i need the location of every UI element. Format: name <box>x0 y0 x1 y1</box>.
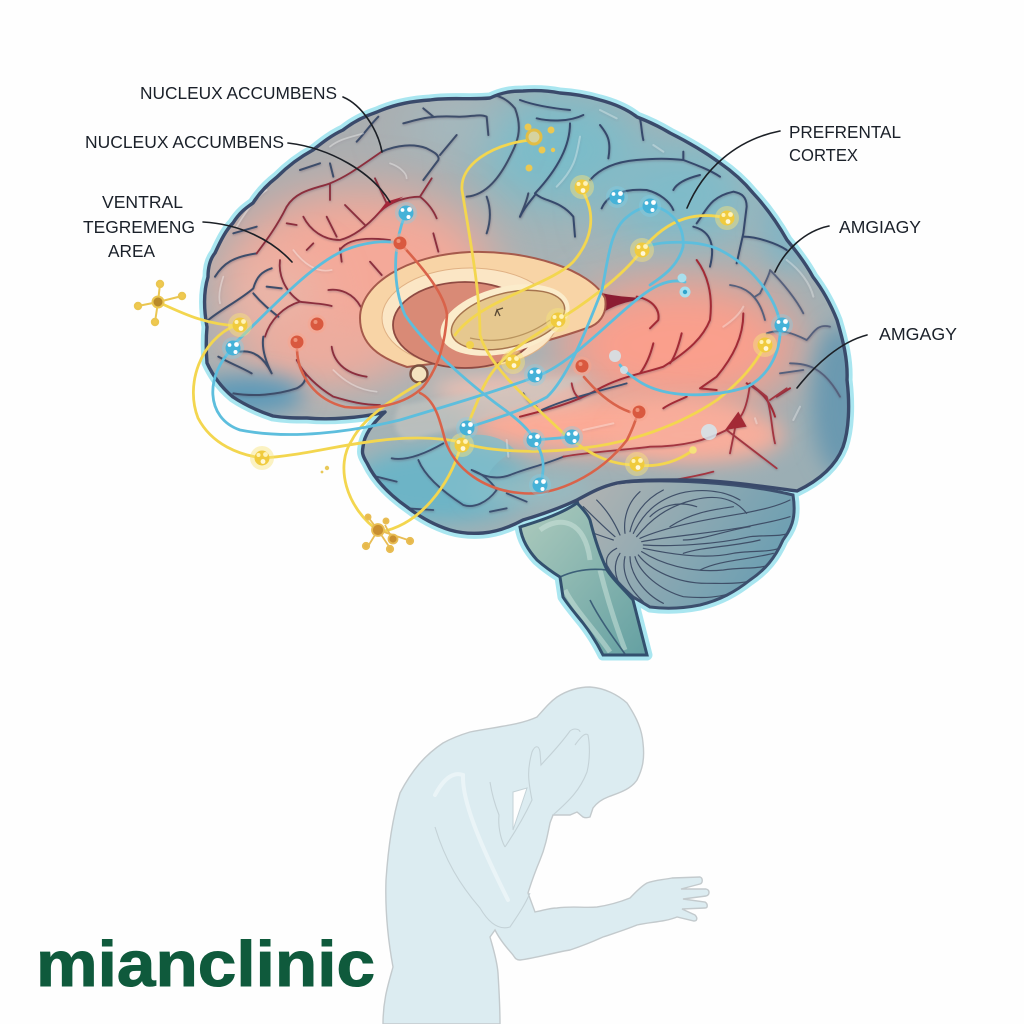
label: prefrental cortex <box>687 122 901 208</box>
person silhouette <box>383 687 709 1024</box>
yellow nodes <box>228 175 777 476</box>
temporal inner pocket <box>417 435 515 504</box>
brain <box>195 90 868 655</box>
person raised hand and forearm lines <box>435 729 589 928</box>
label: ventral tegremeng area <box>83 192 292 262</box>
left molecule <box>135 281 185 325</box>
gyri: temporal <box>377 383 800 512</box>
gyri: parietal and occipital <box>520 100 840 417</box>
label: nucleux accumbens 1 <box>140 83 382 152</box>
label: ventral tegremeng area: VENTRAL <box>102 192 183 212</box>
label: amgagy: AMGAGY <box>879 324 957 344</box>
label: nucleux accumbens 2 <box>85 132 390 202</box>
cerebrum fill <box>204 91 849 533</box>
label: prefrental cortex: PREFRENTAL <box>789 122 901 142</box>
brainstem <box>520 503 647 655</box>
colour glow <box>195 90 868 523</box>
yellow neural pathways <box>158 140 765 532</box>
blue neural pathways <box>213 206 780 485</box>
small tract marks <box>495 308 503 316</box>
gyri: frontal <box>208 93 528 405</box>
temporal band <box>395 375 590 440</box>
small loop <box>410 366 428 382</box>
neuron nodes <box>135 124 793 552</box>
label: nucleux accumbens 1: NUCLEUX ACCUMBENS <box>140 83 337 103</box>
label: amgiagy: AMGIAGY <box>839 217 921 237</box>
label: amgiagy <box>775 217 921 272</box>
blue nodes <box>222 186 793 496</box>
label: prefrental cortex: CORTEX <box>789 145 858 165</box>
label: amgagy <box>797 324 957 388</box>
cerebellum <box>577 481 794 608</box>
halo <box>204 91 849 655</box>
label: ventral tegremeng area: AREA <box>108 241 155 261</box>
person shoulder highlight <box>435 774 508 900</box>
limbic ring <box>360 252 606 368</box>
cerebrum outline <box>204 91 849 533</box>
gap between arm and chest <box>513 788 527 830</box>
logo: mianclinic: mianclinic <box>36 928 375 1000</box>
red neural pathways <box>297 243 638 493</box>
red nodes <box>288 234 648 422</box>
top molecule <box>524 124 555 172</box>
label: ventral tegremeng area: TEGREMENG <box>83 217 195 237</box>
bottom molecule <box>363 514 413 552</box>
label: nucleux accumbens 2: NUCLEUX ACCUMBENS <box>85 132 284 152</box>
